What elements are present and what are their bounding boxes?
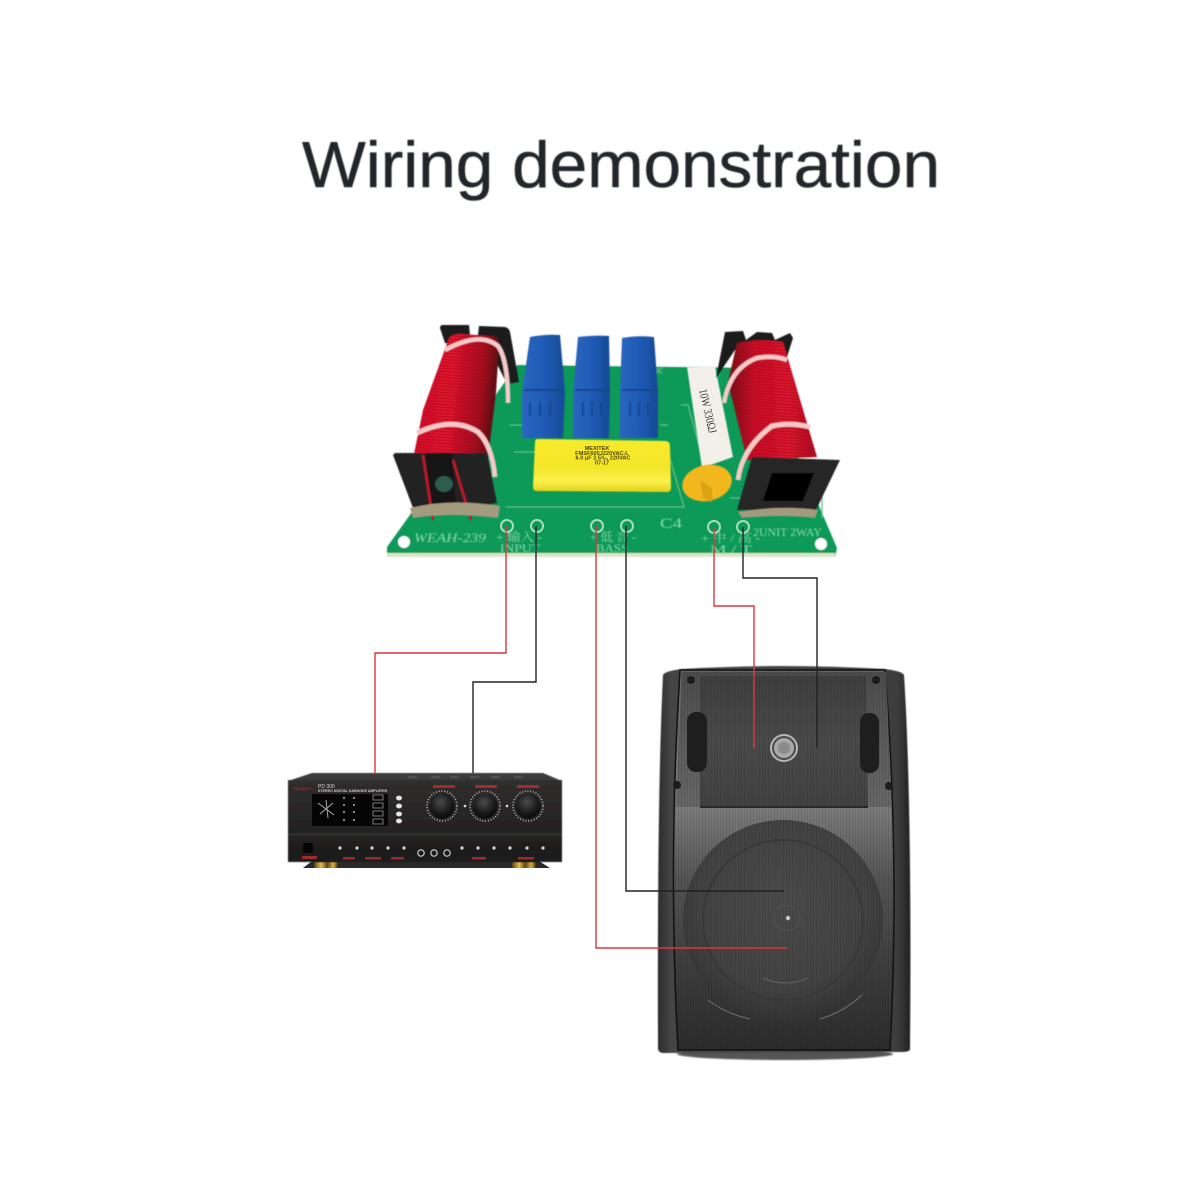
amplifier mode buttons [396,796,402,823]
blue capacitors [522,335,658,438]
speaker screw holes [673,676,893,790]
wire: bass + to woofer [596,526,787,948]
board silkscreen labels: + 中 / 高 - [701,530,760,545]
board silkscreen labels: WEAH-239 [414,530,487,545]
solder pads [501,520,749,533]
amplifier display [312,794,388,826]
board silkscreen labels: C4 [660,516,683,532]
speaker side slots [687,712,879,773]
upper grille panel [700,676,868,807]
yellow capacitor [533,439,671,492]
board silkscreen labels: 2UNIT 2WAY [753,525,822,539]
speaker tweeter [770,734,798,762]
grille mesh texture [673,670,894,1050]
yellow capacitor: FMSF605J220VAC-L [575,451,629,457]
wire: amp positive to input + [375,526,506,773]
wire: amp negative to input - [473,526,536,773]
amplifier knobs [427,785,543,821]
left inductor coil [393,325,519,520]
board silkscreen labels [414,516,822,556]
amplifier brand and model text: PD 300 [318,784,335,790]
board silkscreen labels: + 输入 - [496,529,542,544]
board silkscreen labels: BASS [596,541,628,555]
title: Wiring demonstration [302,128,940,201]
wire: mid/high + to tweeter [714,527,754,748]
amplifier brand and model text: STEREO DIGITAL KARAOKE AMPLIFIER [318,789,388,793]
amplifier feet [303,858,550,868]
yellow disc fuse [679,460,735,506]
board silkscreen labels: M / T [710,542,753,556]
amplifier [288,773,562,868]
board silkscreen labels: + 低 音 - [590,529,636,544]
board: green PCB [387,365,837,557]
wire: bass - to woofer [626,526,784,891]
amplifier chassis [288,773,562,862]
yellow capacitor: 6.0 μF 2.5‰, 220VAC [576,456,630,462]
white cement resistor [687,366,733,468]
board: green PCB: uenc [644,365,663,376]
wire: mid/high - to tweeter [743,527,817,748]
amplifier brand and model text [292,784,388,793]
woofer circle [683,820,883,1020]
right inductor coil [716,331,840,518]
upper grille side shading [676,672,892,807]
white cement resistor: 10W 330ΩJ [696,388,720,435]
speaker cabinet [658,666,910,1053]
wall speaker [658,666,910,1060]
amplifier lower control row [302,843,545,860]
amplifier brand and model text: Yamasun [292,786,311,791]
crossover circuit board [387,325,840,557]
speaker grille [673,670,894,1050]
board silkscreen labels: INPUT [500,541,541,555]
yellow capacitor: 07-17 [595,460,609,466]
speaker shadow [677,1048,893,1060]
yellow capacitor: MEXITEK [585,446,609,452]
